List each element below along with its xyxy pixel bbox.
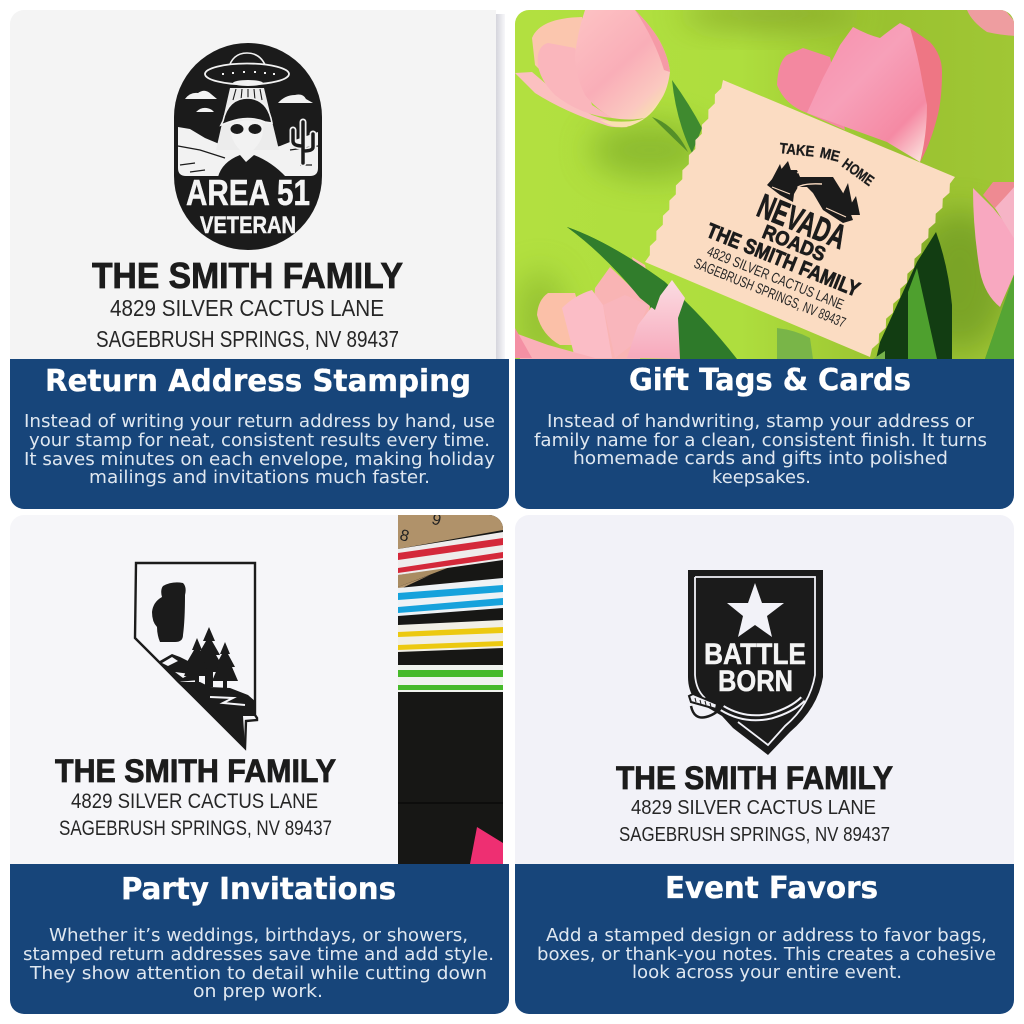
stamp name: THE SMITH FAMILY [92,255,403,296]
body text: Instead of handwriting, stamp your address or [547,411,975,432]
body text: mailings and invitations much faster. [89,467,430,488]
striped straws on dark table: 8 [398,527,411,546]
tulip right edge [973,182,1015,359]
tulip corner petal [967,10,1015,36]
body text: keepsakes. [712,467,811,488]
photo: white envelope with Area 51 stamp [10,10,509,359]
shield icon: Battle Born [688,570,823,755]
tag address line 2: SAGEBRUSH SPRINGS, NV 89437 [692,256,848,331]
stamp address line 2: SAGEBRUSH SPRINGS, NV 89437 [59,817,332,840]
panel: gift tags and cards [515,2,1015,509]
heading: Party Invitations [121,872,396,907]
Nevada state outline icon [135,563,257,748]
sword [689,694,803,718]
tag title arc: HOME [839,155,877,190]
tag stamp roads: ROADS [759,221,829,266]
tag mountain road icon [767,161,860,223]
panel: event favors [515,515,1014,1014]
leaf over bottom tulip [567,227,665,310]
photo: tulips on green with stamped tag [515,2,1015,370]
panel: return address stamping [10,10,509,509]
caption: return address [10,359,509,509]
heading: Return Address Stamping [45,364,471,399]
body text: boxes, or thank-you notes. This creates a cohesive [537,944,996,965]
stamp name: THE SMITH FAMILY [616,760,893,796]
body text: It saves minutes on each envelope, making holiday [24,449,495,470]
stamp address line 1: 4829 SILVER CACTUS LANE [71,790,318,813]
stamp address line 2: SAGEBRUSH SPRINGS, NV 89437 [619,823,890,846]
body text: your stamp for neat, consistent results every time. [29,430,490,451]
body text: Add a stamped design or address to favor bags, [546,925,987,946]
striped straws on dark table [398,511,503,864]
body text [24,411,495,488]
body text: Instead of writing your return address by hand, use [24,411,495,432]
shield text: BATTLE [704,638,806,671]
leaves and stems [567,80,1015,359]
tag address line 1: 4829 SILVER CACTUS LANE [705,244,846,313]
stamp address line 2: SAGEBRUSH SPRINGS, NV 89437 [96,326,399,352]
heading: Event Favors [665,871,878,906]
body text: Whether it’s weddings, birthdays, or showers, [49,925,468,946]
tulip bottom left [515,257,685,359]
tag family name: THE SMITH FAMILY [703,219,863,302]
panel: party invitations [10,511,509,1014]
body text [23,925,494,1002]
shield icon: Battle Born: BORN [718,665,793,698]
tulip top left [515,10,670,127]
paper tag [645,80,955,357]
caption: event favors [515,864,1014,1014]
photo: card with Battle Born stamp [515,515,1014,864]
tulip top right [777,23,942,162]
tag title arc: TAKE [779,140,815,161]
tag title arc: ME [818,144,842,166]
tag stamp nevada: NEVADA [752,187,852,257]
body text: stamped return addresses save time and add style. [23,944,494,965]
badge text: AREA 51 [186,172,310,213]
heading: Gift Tags & Cards [629,363,911,398]
striped straws on dark table: 9 [430,511,443,530]
tag title arc [780,142,875,186]
badge: Area 51 veteran [174,43,322,250]
stamp name: THE SMITH FAMILY [55,753,336,789]
body text [534,411,987,488]
body text [537,925,996,983]
stamp address line 1: 4829 SILVER CACTUS LANE [631,796,876,819]
photo: white card and striped straws [10,511,503,864]
stamp address line 1: 4829 SILVER CACTUS LANE [110,295,384,321]
caption: party invitations [10,864,509,1014]
badge: Area 51 veteran: VETERAN [200,212,296,239]
body text: family name for a clean, consistent finish. It turns [534,430,987,451]
body text: look across your entire event. [632,962,902,983]
body text: They show attention to detail while cutting down [29,963,487,984]
caption: gift tags [515,359,1014,509]
body text: homemade cards and gifts into polished [573,448,948,469]
body text: on prep work. [193,981,323,1002]
